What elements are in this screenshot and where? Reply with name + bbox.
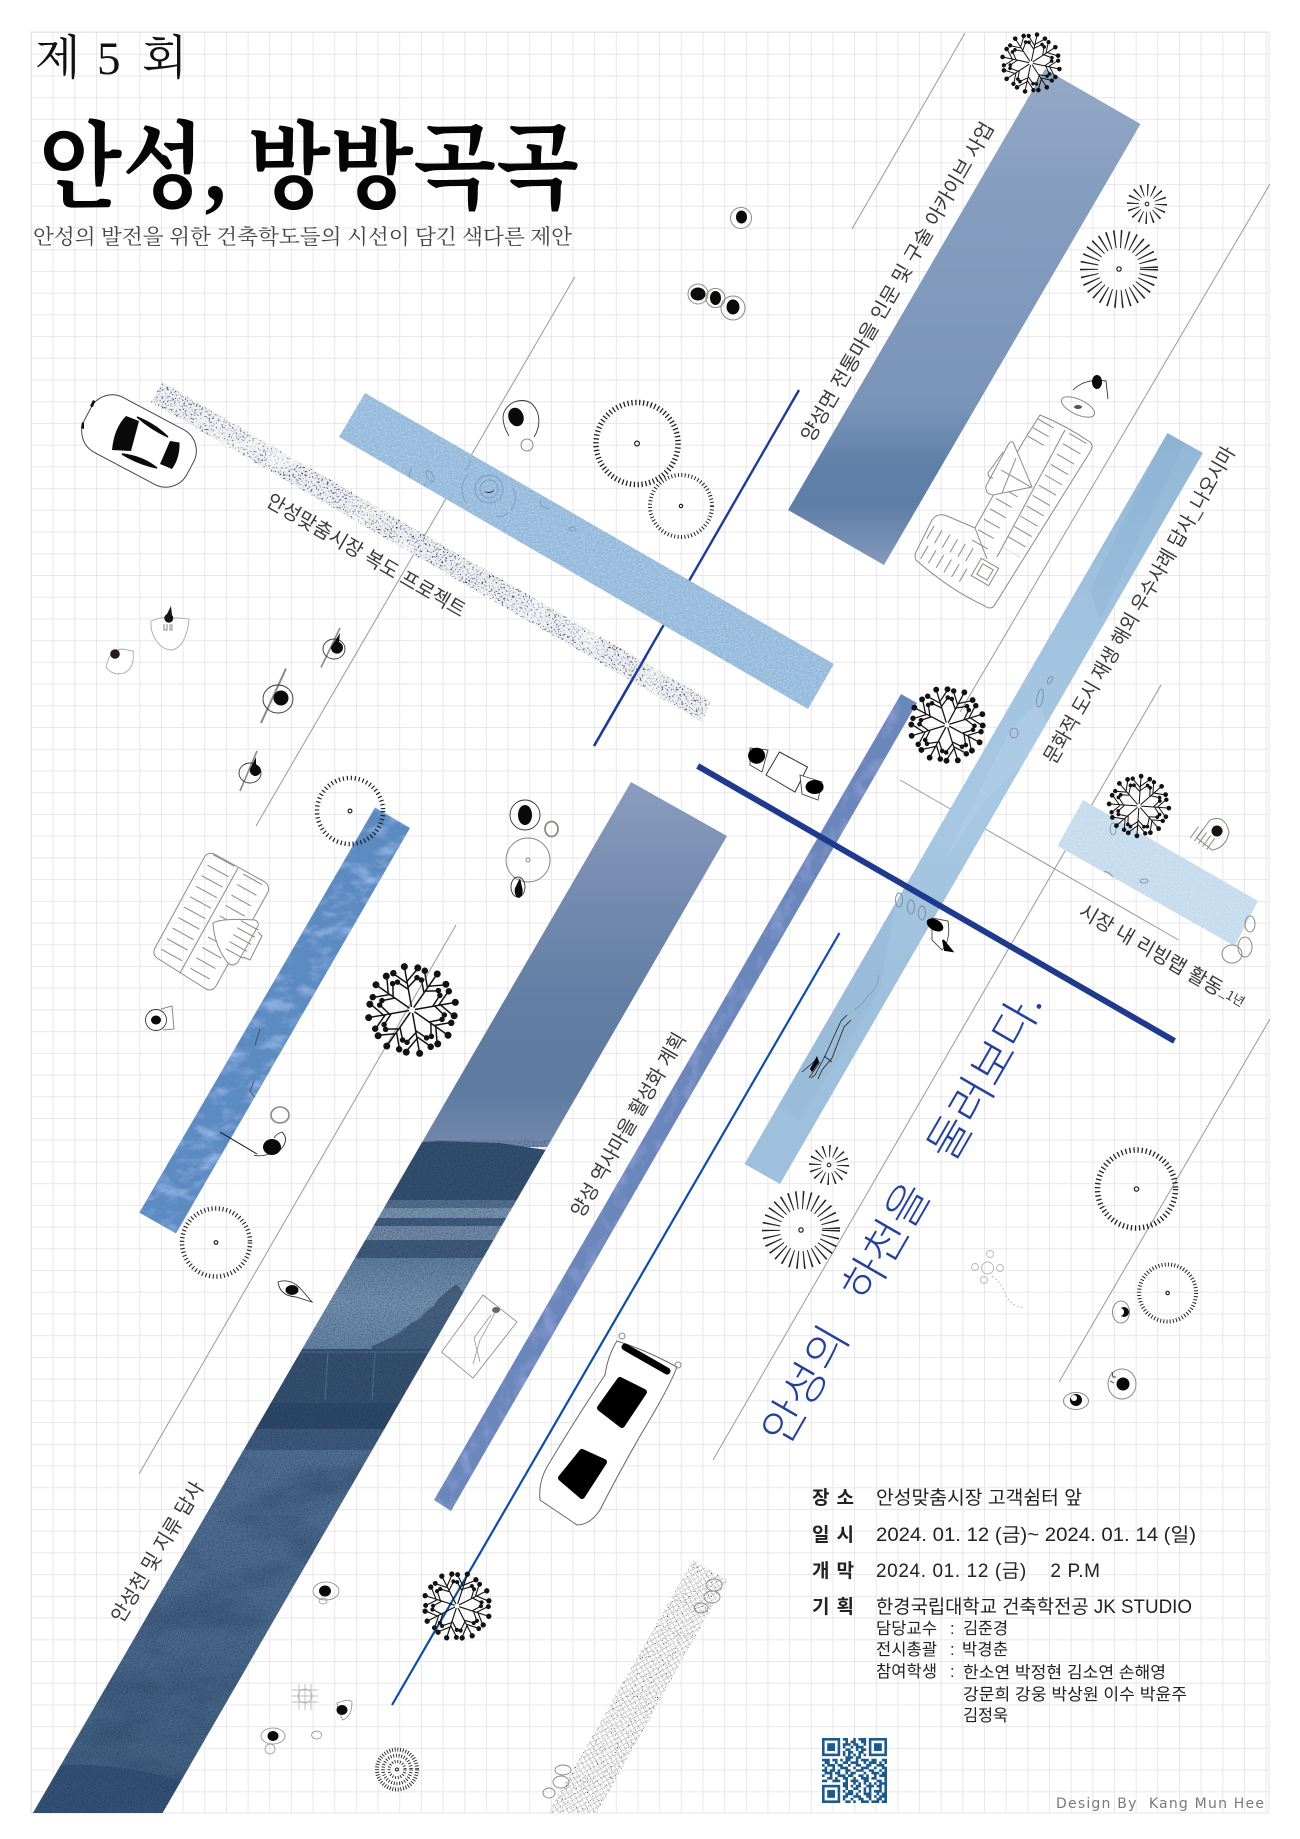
- details: dates: 2024. 01. 12 (금)~ 2024. 01. 14 (일): [876, 1524, 1196, 1546]
- band: big river photo: [30, 782, 730, 1813]
- label: top-right archive project: 양성면 전통마을 인문 및 구술 아카이브 사업: [792, 116, 1000, 446]
- label: market corridor project: 안성맞춤시장 복도 프로젝트: [262, 485, 472, 623]
- icon: person head with circle table: [506, 800, 558, 898]
- icon: car top view: [73, 386, 205, 496]
- icon: QR code: [822, 1739, 887, 1802]
- stone wall in photo: [270, 1349, 430, 1403]
- heading: blue rotated slogan: [742, 977, 1056, 1454]
- heading: blue rotated slogan: 안성의: [742, 1312, 862, 1454]
- bush in photo: [372, 1284, 470, 1350]
- band: dark sky photo, upper right: [788, 69, 1141, 565]
- band: water texture strip, left: [139, 807, 411, 1234]
- band: speckled corridor: [150, 380, 715, 725]
- credit: designer: Design By Kang Mun Hee: [1056, 1796, 1264, 1812]
- details: venue: 장 소: [812, 1487, 854, 1509]
- icon: figures with poles: [239, 628, 345, 791]
- thick navy line: [698, 766, 1174, 1041]
- thin blue line, centre: [392, 933, 840, 1705]
- icon: person at sink: [1059, 375, 1108, 421]
- icon: faint molecule with dotted tail: [972, 1250, 1023, 1308]
- band: long blue textured strip: [434, 694, 918, 1512]
- icon: persons, top group: [688, 208, 752, 320]
- heading: main title: 안성, 방방곡곡: [39, 115, 579, 221]
- thin navy line through speckled band: [594, 656, 646, 746]
- details: credits: 한소연 박정현 김소연 손해영: [963, 1663, 1166, 1682]
- icon: radial bursts: [771, 190, 1161, 1260]
- label: overseas case study: 문화적 도시 재생 해외 우수사례 답사_나오시마: [1035, 440, 1241, 768]
- heading: blue rotated slogan: 둘러보다.: [908, 977, 1056, 1171]
- details: opening: 2024. 01. 12 (금) 2 P.M: [876, 1561, 1100, 1582]
- icon: person with fishing rod: [220, 1107, 289, 1156]
- details: credits: 강문희 강웅 박상원 이수 박윤주: [963, 1685, 1187, 1704]
- details: credits: 박경춘: [962, 1640, 1008, 1659]
- title: edition number: 제: [35, 33, 80, 85]
- sky in photo: [419, 782, 727, 1147]
- icon: seated person with ball, upper centre: [503, 400, 539, 451]
- icon: cloaked figures: [106, 606, 189, 674]
- treeline in photo: [386, 1141, 546, 1205]
- details: venue: 안성맞춤시장 고객쉼터 앞: [876, 1487, 1082, 1509]
- icon: dashed tree rings: [182, 402, 1196, 1790]
- icon: inflatable raft: [540, 1333, 681, 1525]
- details: credits: [876, 1619, 1187, 1725]
- ground in photo: [33, 1450, 372, 1813]
- band: hatched grid strip, bottom: [545, 1558, 730, 1814]
- details: credits: :: [950, 1663, 955, 1681]
- details: credits: :: [950, 1620, 955, 1638]
- icon: swimmer: [802, 975, 878, 1079]
- subtitle: 안성의 발전을 위한 건축학도들의 시선이 담긴 색다른 제안: [33, 225, 573, 249]
- icon: sofa plan sketch, left: [154, 853, 269, 990]
- icon: towel with lying figure: [442, 1295, 517, 1378]
- icon: person, lower left: [278, 1281, 312, 1302]
- details: credits: :: [950, 1641, 955, 1659]
- details: opening: 개 막: [812, 1560, 854, 1582]
- title: edition number: 회: [142, 33, 187, 85]
- band: long light blue diagonal: [744, 433, 1204, 1185]
- icon: person with chair, left: [146, 1006, 174, 1030]
- text block: exhibition details: [812, 1487, 1196, 1725]
- label: historic village: 양성 역사마을 활성화 계획: [562, 1026, 692, 1222]
- icon: sofa plan sketch, right: [915, 415, 1092, 608]
- icon: person on thick line: [896, 893, 952, 951]
- icon: trees: [346, 26, 1173, 1651]
- thin navy line, upper centre: [594, 390, 799, 746]
- band: light blue water strip: [339, 392, 835, 710]
- details: credits: 담당교수: [876, 1619, 937, 1638]
- title: edition number: 5: [97, 33, 120, 85]
- icon: person with chair and stones, right: [1194, 818, 1255, 963]
- details: organiser: 한경국립대학교 건축학전공 JK STUDIO: [876, 1596, 1192, 1618]
- details: credits: 참여학생: [876, 1662, 937, 1681]
- details: dates: 일 시: [812, 1524, 854, 1546]
- details: credits: 김정욱: [963, 1706, 1008, 1725]
- label: stream survey: 안성천 및 지류 답사: [102, 1475, 210, 1627]
- details: credits: 전시총괄: [876, 1640, 937, 1659]
- icon: persons, lower right: [1064, 1301, 1136, 1410]
- water ripple on light band: [409, 460, 575, 531]
- icon: persons at table: [748, 748, 824, 800]
- water in photo: [302, 1258, 484, 1350]
- icon: persons and small items, bottom left: [261, 1579, 722, 1798]
- heading: blue rotated slogan: 하천을: [823, 1169, 943, 1311]
- label: living lab: 시장 내 리빙랩 활동_1년: [1074, 895, 1252, 1015]
- details: credits: 김준경: [963, 1619, 1008, 1638]
- band: pale blue market strip: [1057, 800, 1259, 947]
- details: organiser: 기 획: [812, 1596, 854, 1618]
